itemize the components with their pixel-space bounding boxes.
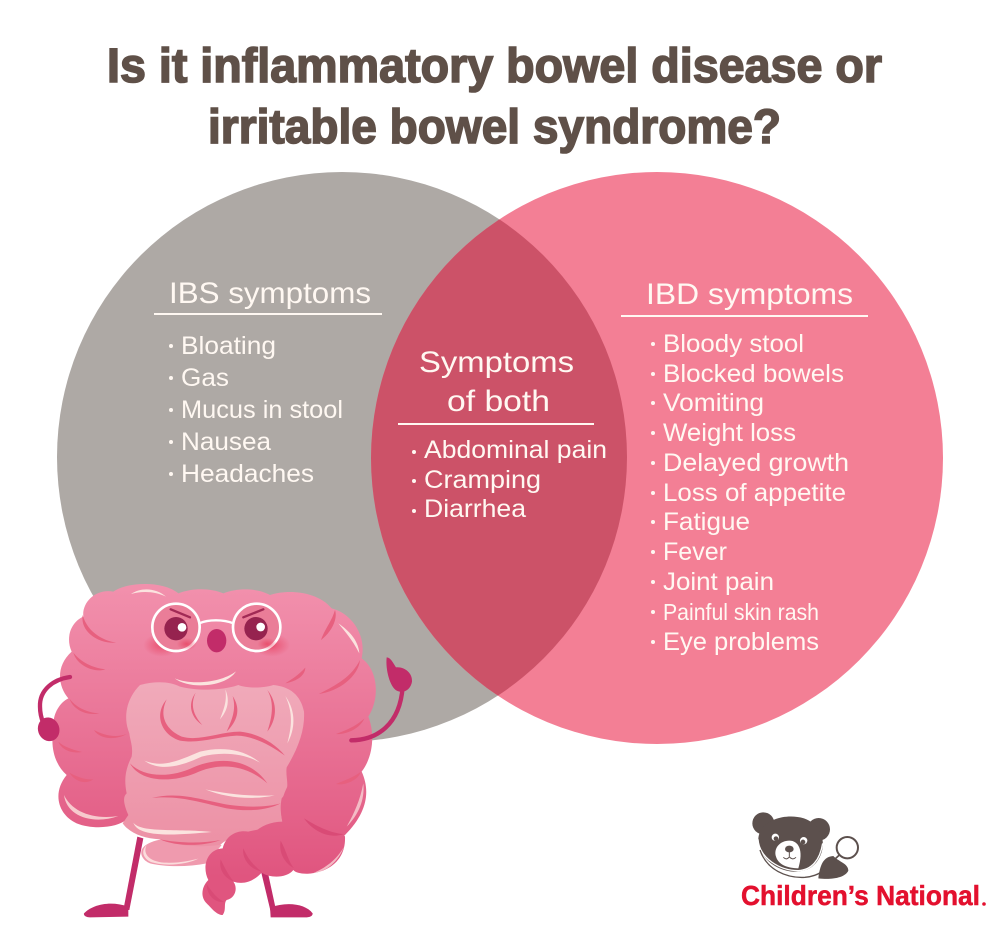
list: IBD: Weight loss <box>663 419 796 447</box>
list: IBD: Vomiting <box>663 389 764 417</box>
panel: IBS symptoms <box>154 277 382 488</box>
heading: symptoms of both: of both <box>447 385 550 418</box>
list: IBS: Nausea <box>181 428 271 456</box>
overlap: both <box>371 220 627 696</box>
list: both: Cramping <box>424 466 541 494</box>
colon outer body <box>52 584 376 847</box>
venn diagram <box>57 172 943 744</box>
list: both: Abdominal pain <box>424 436 607 464</box>
icon: bear with stethoscope <box>752 812 858 879</box>
list: IBD: Eye problems <box>663 628 819 656</box>
list: IBS <box>169 332 343 488</box>
title <box>107 40 882 154</box>
face: glasses and eyes <box>152 604 280 652</box>
list: IBD: Loss of appetite <box>663 479 846 507</box>
list: IBD: Joint pain <box>663 568 774 596</box>
heading: IBD symptoms: IBD symptoms <box>646 278 853 311</box>
logo: Children's National <box>741 812 986 911</box>
list: IBD: Delayed growth <box>663 449 849 477</box>
colon lower right and sigmoid tube <box>202 787 345 915</box>
illustration: intestine character <box>35 584 412 917</box>
panel: IBD symptoms <box>621 278 868 656</box>
title: irritable bowel syndrome? <box>208 101 781 154</box>
circle: IBD <box>371 172 943 744</box>
panel: symptoms of both <box>398 346 607 523</box>
intestine highlights <box>64 589 364 873</box>
list: both <box>412 436 607 523</box>
list: IBS: Gas <box>181 364 229 392</box>
list: IBS: Headaches <box>181 460 314 488</box>
wordmark: Children’s National <box>741 880 980 911</box>
list: IBS: Bloating <box>181 332 276 360</box>
heading: IBS symptoms: IBS symptoms <box>169 277 371 310</box>
list: IBD: Fatigue <box>663 508 750 536</box>
heading: symptoms of both <box>419 346 574 418</box>
title: Is it inflammatory bowel disease or <box>107 40 882 93</box>
list: IBD: Fever <box>663 538 727 566</box>
small intestine <box>123 682 304 846</box>
list: IBD: Painful skin rash <box>663 599 819 625</box>
list: IBD <box>651 330 849 656</box>
heading: symptoms of both: Symptoms <box>419 346 574 379</box>
small intestine base lobe <box>141 838 222 866</box>
list: IBD: Blocked bowels <box>663 360 844 388</box>
list: both: Diarrhea <box>424 495 526 523</box>
arms and hands <box>35 657 412 744</box>
list: IBD: Bloody stool <box>663 330 804 358</box>
circle: IBS <box>57 172 627 742</box>
intestine fold lines <box>58 610 364 902</box>
list: IBS: Mucus in stool <box>181 396 343 424</box>
legs and feet <box>84 837 313 917</box>
blush <box>143 633 290 657</box>
